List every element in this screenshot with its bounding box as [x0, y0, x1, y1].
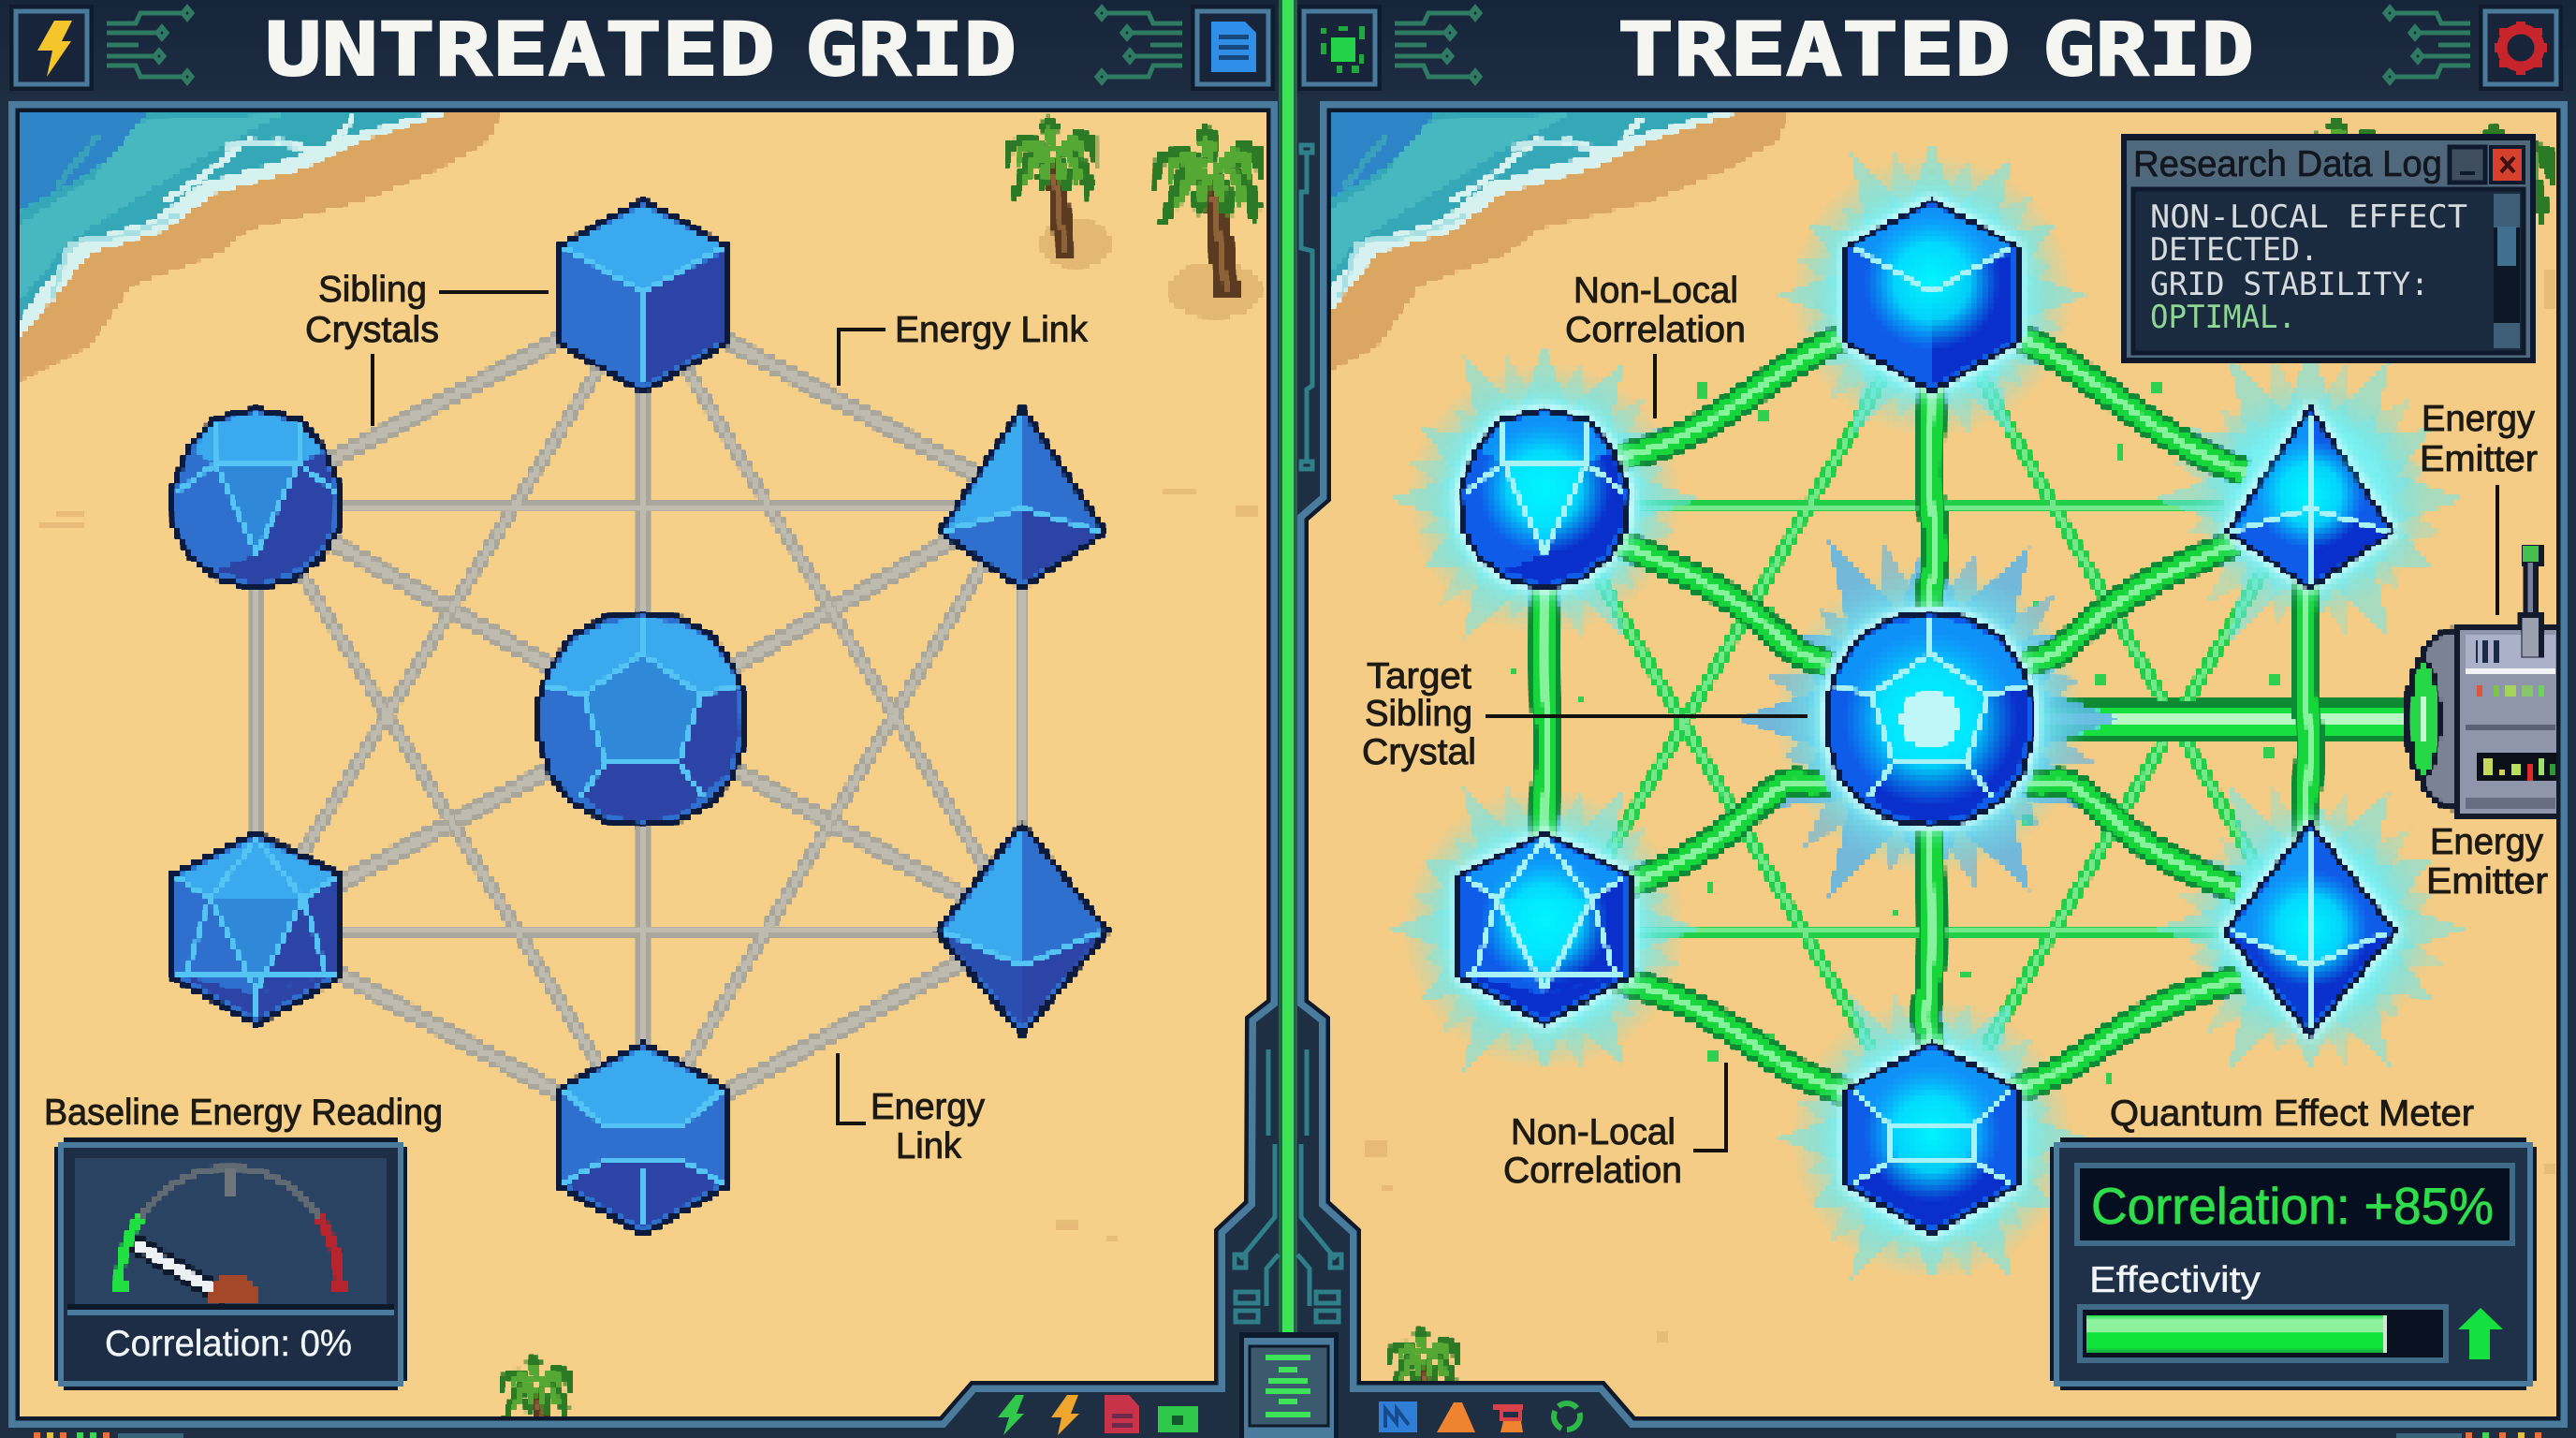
emitter body: [2459, 629, 2562, 814]
treated glow layer: [1377, 125, 2481, 1299]
bottom icons: left tray: [998, 1395, 1198, 1435]
log title: Research Data Log: [2133, 144, 2442, 184]
label: energy emitter top: Emitter: [2420, 439, 2538, 479]
icon box: document: [1191, 5, 1275, 91]
label: non-local correlation bottom: [1503, 1063, 1726, 1191]
icon: red document: [1105, 1395, 1139, 1433]
right panel: shoreline: [1308, 112, 1789, 381]
bottom icons: right tray: [1379, 1401, 1580, 1432]
crystal: lower right treated: [2225, 824, 2395, 1034]
gauge value: Correlation: 0%: [105, 1324, 352, 1364]
label: non-local correlation top: [1565, 271, 1746, 418]
log body: GRID STABILITY:: [2150, 266, 2429, 303]
label: target sibling crystal: Target: [1367, 656, 1471, 697]
label: energy link bottom: [838, 1053, 985, 1167]
title: untreated grid: UNTREATED: [265, 8, 775, 93]
icon: minimize button: [2450, 147, 2485, 183]
circuit traces left: [107, 7, 192, 82]
title: untreated grid: GRID: [805, 8, 1017, 93]
bottom strip: LED rows: [34, 1432, 2541, 1438]
circuit traces right: [2385, 7, 2470, 82]
emitter antenna: [2522, 546, 2542, 657]
correlation readout: Correlation: +85%: [2091, 1177, 2494, 1235]
crystal: bottom untreated: [558, 1043, 728, 1234]
icon box: green chip: [1297, 5, 1382, 91]
gauge dial: [112, 1167, 349, 1304]
palm tree upper-left panel small: [1005, 116, 1097, 257]
crystal: top untreated: [558, 200, 728, 391]
untreated grid links: [256, 296, 1022, 1138]
panel: research data log: [2121, 134, 2536, 363]
icon box: lightning bolt: [9, 5, 94, 91]
palm tree upper-left panel large: [1153, 124, 1266, 296]
treated grid thick correlation links: [1544, 339, 2310, 1095]
label: target sibling crystal: Sibling: [1365, 694, 1472, 734]
log body: [2133, 189, 2524, 353]
icon: red tool: [1493, 1404, 1523, 1432]
label: target sibling crystal: [1362, 656, 1808, 772]
emitter readout: [2479, 751, 2561, 783]
log scrollbar: [2494, 194, 2520, 348]
label: energy emitter top: Energy: [2422, 399, 2535, 439]
energy emitter device: [2407, 546, 2562, 814]
crystal: upper right treated: [2228, 408, 2393, 588]
crystal: upper right untreated: [940, 408, 1105, 588]
icon: orange bolt: [1051, 1395, 1079, 1435]
label: energy emitter bottom: Emitter: [2426, 861, 2548, 902]
title: treated grid: TREATED: [1617, 8, 2011, 93]
log body: OPTIMAL.: [2150, 299, 2296, 336]
crystal: upper left treated: [1460, 409, 1629, 589]
palm behind data log: [2314, 118, 2376, 134]
panel: quantum effect meter: [2050, 1137, 2537, 1390]
treated grid thin correlation links: [1596, 374, 2267, 1049]
crystal: bottom treated: [1847, 1043, 2017, 1234]
icon: up arrow: [2458, 1308, 2503, 1359]
label: energy emitter bottom: Energy: [2430, 822, 2543, 862]
heading: quantum effect meter: Quantum Effect Meter: [2110, 1093, 2474, 1134]
label: energy link top: [839, 310, 1088, 386]
label: sibling crystals: Sibling: [318, 270, 427, 310]
icon: blue square: [1379, 1401, 1417, 1432]
icon: close button: [2491, 147, 2524, 183]
effectivity label: Effectivity: [2089, 1260, 2261, 1300]
sand specks: [37, 271, 2557, 1343]
label: energy link bottom: Link: [896, 1126, 961, 1167]
palm right edge: [2482, 124, 2555, 225]
heading: baseline energy reading: Baseline Energy Reading: [44, 1093, 443, 1133]
label: non-local correlation top: Correlation: [1565, 310, 1746, 350]
label: energy emitter bottom: [2426, 822, 2548, 902]
label: energy emitter top: [2420, 399, 2538, 615]
left panel: shoreline: [20, 112, 501, 381]
circuit traces left: [1395, 7, 1480, 82]
icon: green cycle: [1554, 1403, 1580, 1430]
label: energy link top: Energy Link: [895, 310, 1088, 350]
palm tree bottom left: [500, 1354, 573, 1416]
center divider column: [1235, 0, 1341, 1339]
log body: NON-LOCAL EFFECT: [2150, 198, 2467, 236]
crystal: lower left untreated: [171, 833, 342, 1024]
bottom center console: [1239, 1332, 1339, 1438]
title: untreated grid: [265, 8, 1017, 93]
log body: DETECTED.: [2150, 231, 2319, 269]
label: target sibling crystal: Crystal: [1362, 732, 1476, 772]
circuit traces right: [1097, 7, 1182, 82]
label: energy link bottom: Energy: [871, 1087, 985, 1127]
icon: orange hill: [1437, 1402, 1475, 1432]
header: untreated: [0, 0, 1281, 95]
crystal: center untreated: [539, 612, 745, 826]
header: treated: [1295, 0, 2576, 95]
emitter lens: [2409, 661, 2439, 777]
label: sibling crystals: Crystals: [305, 310, 439, 350]
icon: green module: [1158, 1406, 1198, 1432]
label: non-local correlation bottom: Non-Local: [1511, 1112, 1676, 1152]
label: non-local correlation top: Non-Local: [1573, 271, 1738, 311]
label: sibling crystals: [305, 270, 549, 426]
title: treated grid: GRID: [2042, 8, 2254, 93]
title: treated grid: [1617, 8, 2254, 93]
crystal: lower right untreated: [937, 824, 1107, 1034]
panel: baseline gauge: [54, 1137, 407, 1390]
energy beam: [2031, 699, 2415, 742]
icon: green bolt: [998, 1395, 1024, 1435]
crystal: lower left treated: [1459, 833, 1630, 1024]
effectivity bar: [2080, 1307, 2446, 1360]
shadows under palms: [1040, 219, 1262, 318]
emitter dome: [2407, 629, 2511, 809]
palm tree bottom right: [1387, 1326, 1460, 1381]
label: non-local correlation bottom: Correlation: [1503, 1151, 1682, 1191]
crystal: top treated: [1847, 200, 2017, 391]
icon box: red gear: [2479, 5, 2563, 91]
green sparks: [1509, 384, 2278, 1082]
crystal: upper left untreated: [172, 409, 341, 589]
crystal: target center treated: [1827, 612, 2033, 826]
